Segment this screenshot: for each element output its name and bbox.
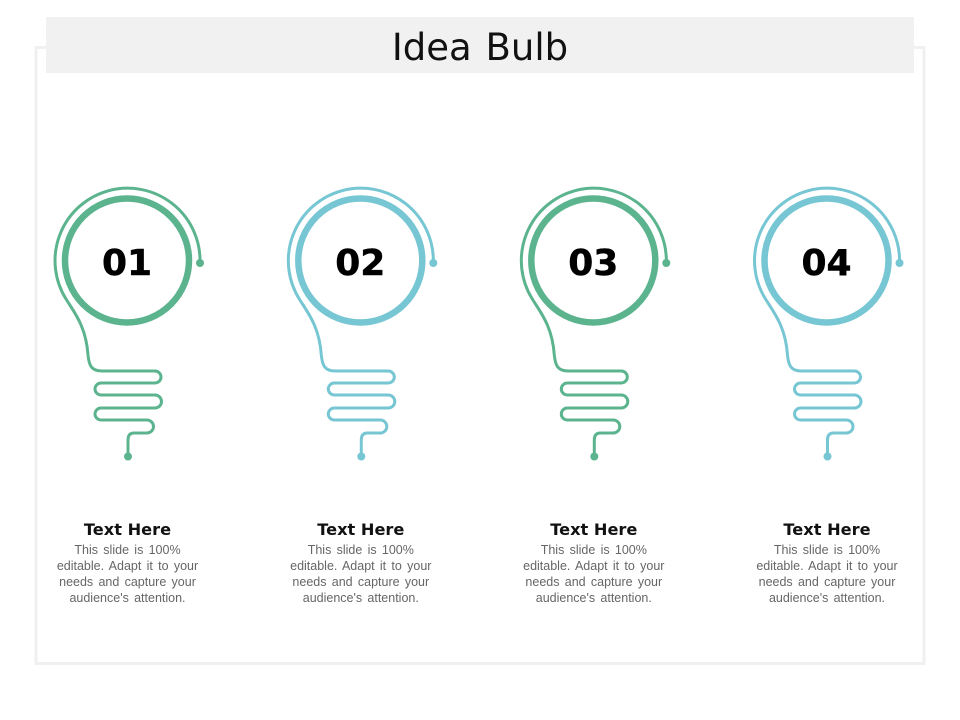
text block 01: Text Here [84, 520, 171, 539]
text block 02: audience's attention. [303, 591, 419, 605]
bulb column 04 [755, 188, 904, 605]
title: Idea Bulb [392, 26, 568, 69]
number 01: 01 [102, 243, 152, 284]
slide frame [36, 48, 924, 664]
text block 04: editable. Adapt it to your [756, 559, 898, 573]
bulb column 02 [288, 188, 437, 605]
text block 04: needs and capture your [759, 575, 895, 589]
number 02: 02 [335, 243, 385, 284]
text block 04: audience's attention. [769, 591, 885, 605]
text block 02: needs and capture your [292, 575, 429, 589]
icon: blue bulb 04 [755, 188, 904, 461]
title banner [46, 17, 914, 73]
text block 02: Text Here [317, 520, 404, 539]
text block 02: editable. Adapt it to your [290, 559, 431, 573]
icon: blue bulb 02 [288, 188, 437, 461]
text block 03: Text Here [550, 520, 637, 539]
number 04: 04 [801, 243, 852, 284]
text block 04 [756, 520, 898, 605]
icon: green bulb 01 [55, 188, 204, 461]
text block 01: editable. Adapt it to your [57, 559, 198, 573]
text block 03: audience's attention. [536, 591, 652, 605]
text block 04: This slide is 100% [774, 543, 880, 557]
text block 01: audience's attention. [69, 591, 186, 605]
icon: green bulb 03 [521, 188, 670, 461]
text block 01: needs and capture your [59, 575, 196, 589]
text block 03: editable. Adapt it to your [523, 559, 664, 573]
text block 03: needs and capture your [525, 575, 662, 589]
text block 01 [57, 520, 198, 605]
text block 03 [523, 520, 664, 605]
bulb column 01 [55, 188, 204, 605]
bulb column 03 [521, 188, 670, 605]
text block 04: Text Here [783, 520, 871, 539]
text block 02 [290, 520, 431, 605]
text block 01: This slide is 100% [74, 543, 181, 557]
text block 03: This slide is 100% [541, 543, 647, 557]
text block 02: This slide is 100% [308, 543, 414, 557]
number 03: 03 [568, 243, 618, 284]
